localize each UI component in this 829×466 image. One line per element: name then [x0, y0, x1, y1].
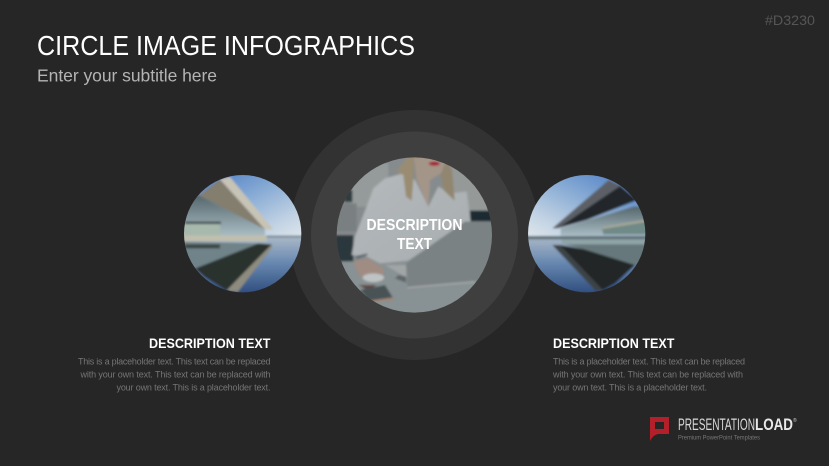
mouse	[363, 273, 384, 282]
left body text: with your own text. This text can be replaced with	[80, 370, 270, 380]
brand logo: LOAD	[755, 415, 793, 434]
desk	[342, 260, 353, 262]
brand logo: ®	[793, 417, 797, 424]
left description block	[78, 335, 271, 392]
neck and face	[414, 157, 447, 207]
left body text	[78, 356, 270, 392]
logo wordmark: PRESENTATION	[678, 415, 755, 434]
left photo: building reflected in water	[182, 173, 305, 295]
title: CIRCLE IMAGE INFOGRAPHICS	[37, 30, 415, 61]
middle ring	[311, 132, 518, 338]
center caption: TEXT	[397, 236, 432, 253]
code label: #D3230	[765, 13, 815, 28]
left body text: your own text. This is a placeholder text.	[116, 382, 270, 392]
brand logo	[650, 415, 797, 442]
outer ring	[290, 110, 540, 360]
center caption: DESCRIPTION	[366, 217, 462, 234]
laptop	[406, 222, 493, 288]
lips	[429, 162, 440, 166]
center photo: woman at laptop	[333, 155, 497, 317]
left heading: DESCRIPTION TEXT	[149, 335, 271, 351]
shirt	[352, 173, 471, 263]
icon: red P	[650, 417, 669, 441]
right heading: DESCRIPTION TEXT	[553, 335, 675, 351]
phone	[360, 285, 393, 302]
wristband	[356, 253, 367, 259]
right photo: building reflected in water	[527, 173, 650, 295]
hand	[354, 258, 384, 278]
center caption	[366, 217, 462, 253]
subtitle: Enter your subtitle here	[37, 66, 217, 86]
right body text: with your own text. This text can be replaced with	[552, 370, 743, 380]
right body text: This is a placeholder text. This text can be replaced	[553, 356, 745, 366]
left body text: This is a placeholder text. This text can be replaced	[78, 356, 270, 366]
right description block	[552, 335, 745, 392]
logo tagline: Premium PowerPoint Templates	[678, 436, 760, 442]
right body text: your own text. This is a placeholder text.	[553, 382, 707, 392]
hair	[397, 157, 414, 201]
central ring graphic	[290, 110, 540, 360]
right body text	[552, 356, 745, 392]
